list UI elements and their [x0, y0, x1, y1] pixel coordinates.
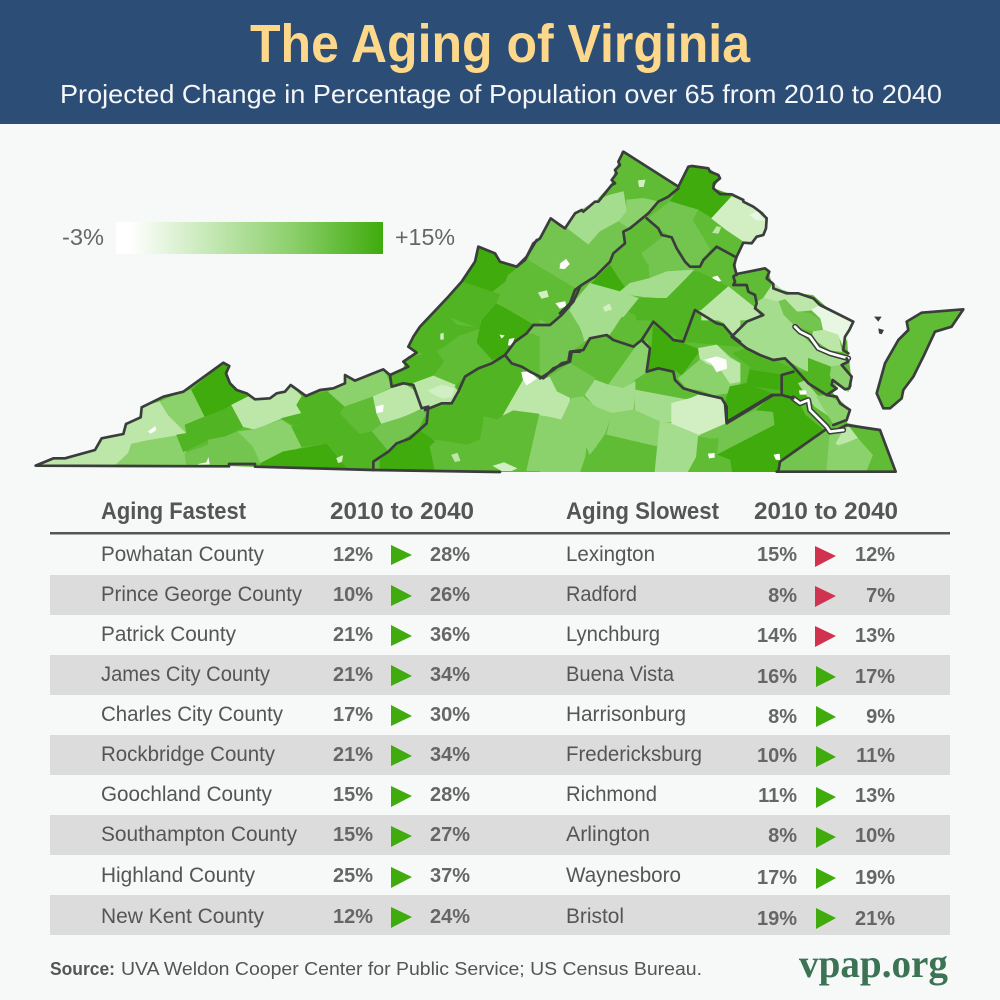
row: New Kent County: New Kent County	[101, 905, 264, 928]
row: Lexington: Lexington	[566, 543, 655, 566]
map: central western counties	[380, 247, 580, 471]
row: Fredericksburg: 11%	[856, 745, 895, 767]
title: The Aging of Virginia	[250, 14, 751, 74]
map: northern neck and peninsula counties	[733, 268, 853, 423]
row: Rockbridge County	[101, 743, 470, 766]
row: Bristol: 21%	[855, 908, 895, 930]
map legend: -3%	[62, 224, 104, 250]
table: aging fastest	[101, 543, 470, 928]
row: New Kent County: 12%	[333, 906, 373, 928]
row: Powhatan County: 12%	[333, 544, 373, 566]
row: Powhatan County: 28%	[430, 544, 470, 566]
row: Fredericksburg: Fredericksburg	[566, 743, 702, 766]
map: regional and state outlines	[36, 152, 963, 472]
row: Bristol: Bristol	[566, 905, 624, 928]
row: Prince George County: 26%	[430, 584, 470, 606]
row: Powhatan County: Powhatan County	[101, 543, 264, 566]
row: Patrick County: 36%	[430, 624, 470, 646]
row: James City County	[101, 663, 470, 686]
header banner	[0, 0, 1000, 124]
row: Waynesboro: Waynesboro	[566, 864, 681, 887]
row: Radford: 8%	[768, 585, 797, 607]
row: Rockbridge County: 34%	[430, 744, 470, 766]
row: Highland County: 25%	[333, 865, 373, 887]
row: Lynchburg: 13%	[855, 625, 895, 647]
row: Charles City County: 30%	[430, 704, 470, 726]
row: Arlington: 10%	[855, 825, 895, 847]
map: shenandoah valley counties	[497, 218, 605, 323]
row: Prince George County: Prince George County	[101, 583, 302, 606]
row: Radford: Radford	[566, 583, 637, 606]
row: New Kent County	[101, 905, 470, 928]
row: Radford	[566, 583, 895, 607]
row: Goochland County: Goochland County	[101, 783, 272, 806]
row: James City County: James City County	[101, 663, 270, 686]
row: New Kent County: 24%	[430, 906, 470, 928]
logo: vpap.org: vpap.org	[799, 941, 948, 986]
row: Waynesboro: 19%	[855, 867, 895, 889]
row: Arlington	[566, 823, 895, 848]
row: Harrisonburg: 8%	[768, 706, 797, 728]
table header: 2010 to 2040	[330, 498, 474, 525]
row: Buena Vista: 16%	[757, 666, 797, 688]
table header: Aging Fastest	[101, 498, 246, 525]
map: tidewater counties	[672, 309, 963, 472]
row: Buena Vista: 17%	[855, 666, 895, 688]
row: James City County: 21%	[333, 664, 373, 686]
row: Harrisonburg	[566, 703, 895, 728]
map legend	[62, 222, 455, 254]
row: Fredericksburg	[566, 743, 895, 767]
row: Highland County: Highland County	[101, 864, 255, 887]
table stripes	[50, 575, 950, 935]
row: Patrick County: 21%	[333, 624, 373, 646]
row: Lynchburg	[566, 623, 895, 647]
row: Arlington: Arlington	[566, 823, 650, 846]
row: Southampton County: Southampton County	[101, 823, 297, 846]
row: Bristol	[566, 905, 895, 930]
row: Richmond: 11%	[758, 785, 797, 807]
row: Highland County: 37%	[430, 865, 470, 887]
row: Richmond	[566, 783, 895, 808]
row: Charles City County: 17%	[333, 704, 373, 726]
row: Prince George County	[101, 583, 470, 606]
row: Charles City County	[101, 703, 470, 726]
row: Prince George County: 10%	[333, 584, 373, 606]
row: Southampton County: 15%	[333, 824, 373, 846]
row: Goochland County: 28%	[430, 784, 470, 806]
row: Southampton County: 27%	[430, 824, 470, 846]
row: Buena Vista: Buena Vista	[566, 663, 674, 686]
row: Charles City County: Charles City County	[101, 703, 283, 726]
row: Richmond: Richmond	[566, 783, 657, 806]
row: Lexington: 12%	[855, 544, 895, 566]
map: northern counties	[560, 152, 767, 320]
row: Waynesboro: 17%	[757, 867, 797, 889]
row: Harrisonburg: Harrisonburg	[566, 703, 686, 726]
row: Waynesboro	[566, 864, 895, 889]
row: Richmond: 13%	[855, 785, 895, 807]
source note: UVA Weldon Cooper Center for Public Service; US Census Bureau.	[121, 959, 702, 979]
row: Patrick County: Patrick County	[101, 623, 236, 646]
table header	[50, 498, 950, 534]
row: Lynchburg: Lynchburg	[566, 623, 660, 646]
row: Powhatan County	[101, 543, 470, 566]
table header: Aging Slowest	[566, 498, 719, 525]
row: Goochland County: 15%	[333, 784, 373, 806]
row: Radford: 7%	[866, 585, 895, 607]
row: Lynchburg: 14%	[757, 625, 797, 647]
row: Bristol: 19%	[757, 908, 797, 930]
row: Rockbridge County: Rockbridge County	[101, 743, 275, 766]
table: aging slowest	[566, 543, 895, 930]
subtitle: Projected Change in Percentage of Population over 65 from 2010 to 2040	[60, 79, 942, 109]
table header: 2010 to 2040	[754, 498, 898, 525]
map: southwest counties	[36, 363, 428, 470]
map of Virginia	[36, 152, 963, 472]
source note: Source:	[50, 959, 115, 979]
map legend: +15%	[395, 224, 455, 250]
map: state base silhouette	[36, 152, 896, 472]
row: Fredericksburg: 10%	[757, 745, 797, 767]
row: Southampton County	[101, 823, 470, 847]
row: James City County: 34%	[430, 664, 470, 686]
row: Arlington: 8%	[768, 825, 797, 847]
row: Buena Vista	[566, 663, 895, 688]
row: Rockbridge County: 21%	[333, 744, 373, 766]
row: Goochland County	[101, 783, 470, 807]
row: Lexington: 15%	[757, 544, 797, 566]
map: piedmont counties	[540, 298, 740, 472]
row: Highland County	[101, 864, 470, 888]
row: Lexington	[566, 543, 895, 567]
row: Patrick County	[101, 623, 470, 646]
row: Harrisonburg: 9%	[866, 706, 895, 728]
